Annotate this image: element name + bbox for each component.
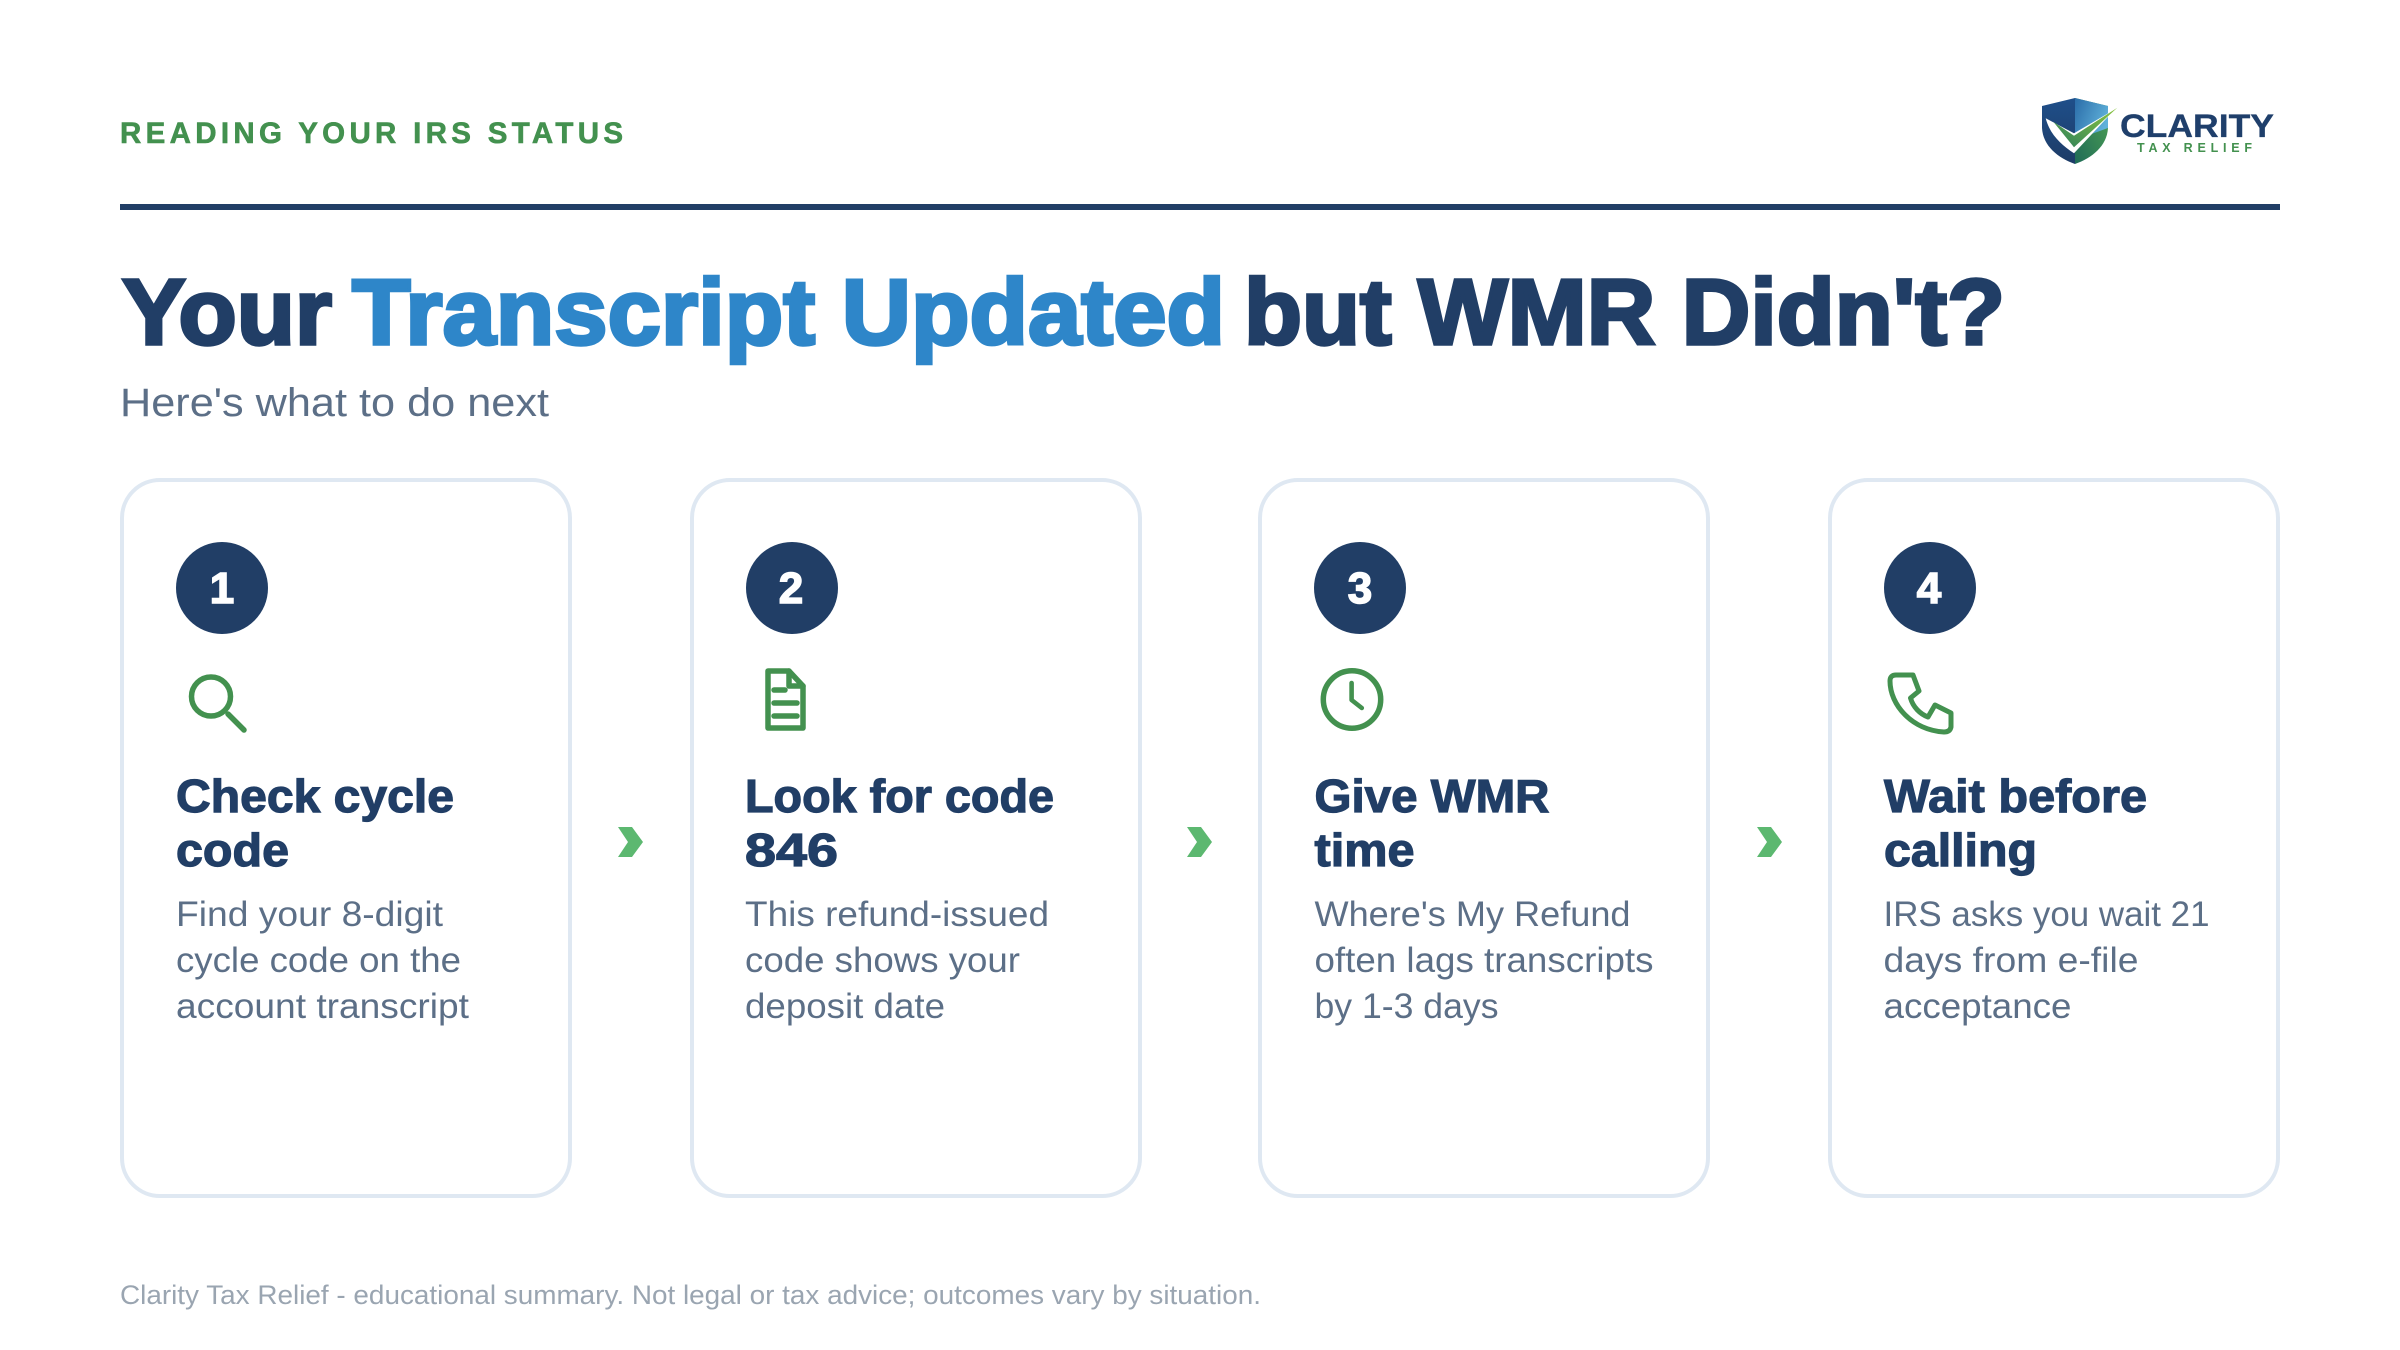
title xyxy=(122,260,2005,364)
step number 1 xyxy=(176,542,268,634)
arrow 3 xyxy=(1757,827,1782,857)
wordmark: CLARITY xyxy=(2120,108,2274,144)
heading: give WMR time xyxy=(1314,770,1550,876)
heading: check cycle code: Check cycle xyxy=(176,770,454,822)
step number 4: 4 xyxy=(1917,564,1942,613)
description: acceptance xyxy=(1884,987,2072,1026)
description: by 1-3 days xyxy=(1314,987,1498,1026)
icon: phone xyxy=(1890,675,1951,732)
heading: wait before calling: calling xyxy=(1884,824,2037,876)
description: days from e-file xyxy=(1884,941,2138,980)
title: but WMR Didn't? xyxy=(1244,260,2005,364)
panel: step 2 xyxy=(692,480,1140,1196)
heading: look for code 846 xyxy=(745,770,1054,876)
description xyxy=(1884,895,2210,1026)
eyebrow label: READING YOUR IRS STATUS xyxy=(120,117,623,150)
description xyxy=(745,895,1049,1026)
icon: magnifying glass xyxy=(192,677,244,730)
heading: wait before calling xyxy=(1884,770,2147,876)
description: IRS asks you wait 21 xyxy=(1884,895,2210,934)
title: Transcript Updated xyxy=(352,260,1225,364)
description: Find your 8-digit xyxy=(176,895,443,934)
icon: clock xyxy=(1323,671,1381,728)
description xyxy=(176,895,469,1026)
step number 3 xyxy=(1314,542,1406,634)
heading: look for code 846: Look for code xyxy=(745,770,1054,822)
title: Your xyxy=(122,260,332,364)
description: account transcript xyxy=(176,987,469,1026)
footer disclaimer: Clarity Tax Relief - educational summary. Not legal or tax advice; outcomes vary by situation. xyxy=(120,1280,1261,1310)
description: often lags transcripts xyxy=(1314,941,1654,980)
icon: document xyxy=(768,671,803,728)
logo: Clarity Tax Relief xyxy=(2042,98,2274,164)
description: deposit date xyxy=(745,987,945,1026)
step number 3: 3 xyxy=(1348,564,1372,613)
step number 2 xyxy=(746,542,838,634)
panel: step 3 xyxy=(1260,480,1708,1196)
heading: give WMR time: time xyxy=(1314,824,1414,876)
heading: check cycle code xyxy=(176,770,454,876)
description: Where's My Refund xyxy=(1314,895,1630,934)
subtitle: Here's what to do next xyxy=(120,381,549,425)
arrow 1 xyxy=(618,827,643,857)
tagline: TAX RELIEF xyxy=(2137,141,2252,155)
heading: give WMR time: Give WMR xyxy=(1314,770,1550,822)
panel: step 1 xyxy=(122,480,570,1196)
step number 1: 1 xyxy=(210,564,234,613)
arrow 2 xyxy=(1187,827,1212,857)
description xyxy=(1314,895,1654,1026)
heading: look for code 846: 846 xyxy=(745,824,838,876)
description: cycle code on the xyxy=(176,941,461,980)
description: code shows your xyxy=(745,941,1020,980)
description: This refund-issued xyxy=(745,895,1049,934)
header rule xyxy=(120,204,2280,210)
heading: wait before calling: Wait before xyxy=(1884,770,2147,822)
step number 2: 2 xyxy=(779,564,803,613)
panel: step 4 xyxy=(1830,480,2278,1196)
step number 4 xyxy=(1884,542,1976,634)
heading: check cycle code: code xyxy=(176,824,289,876)
icon: shield with check xyxy=(2042,98,2117,164)
